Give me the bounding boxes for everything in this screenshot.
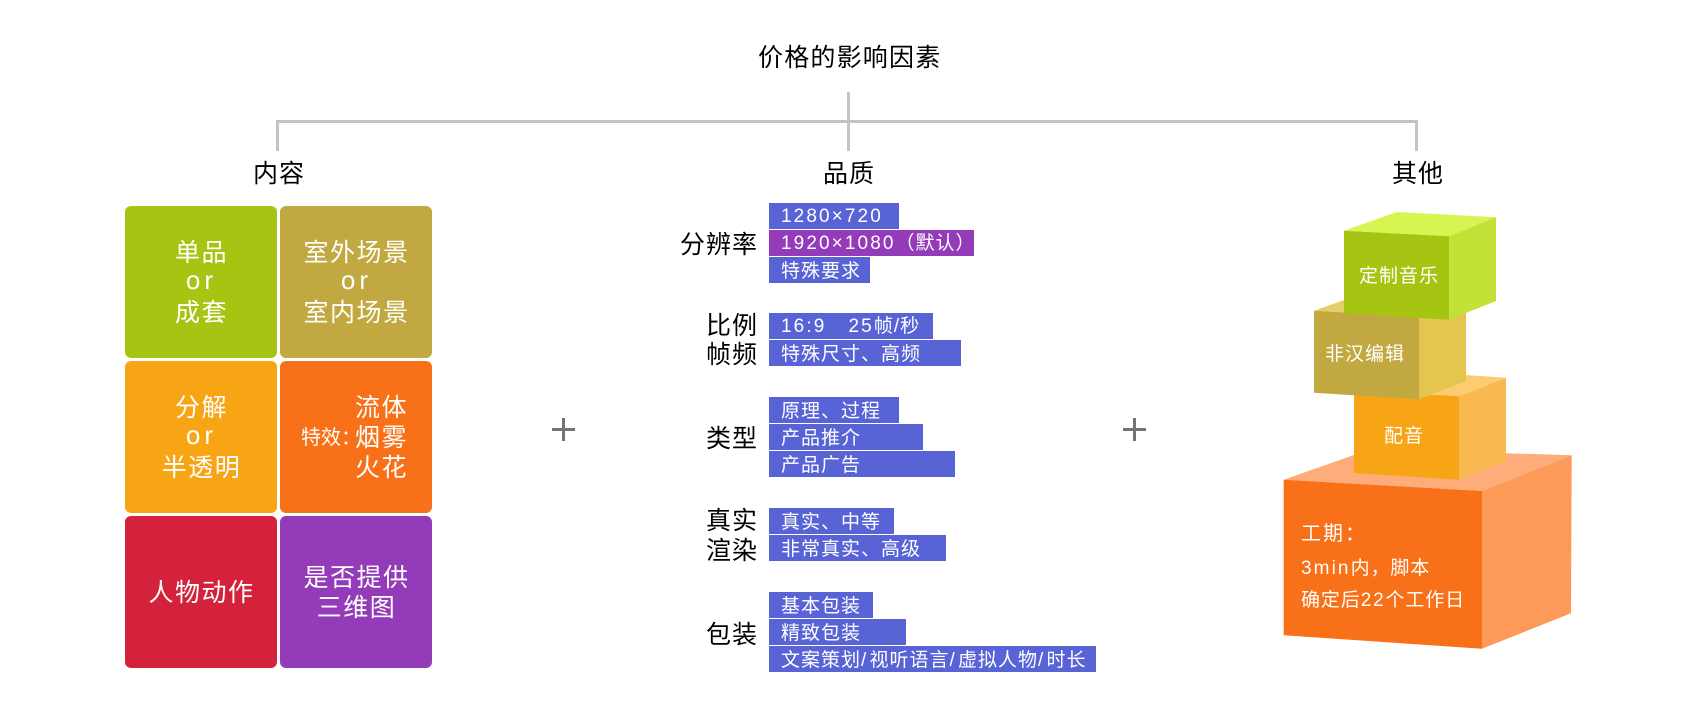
box: voice-over (1354, 371, 1506, 480)
icon: plus left (552, 418, 575, 441)
bar: product intro: 产品推介 (781, 428, 861, 449)
icon: plus right (1123, 418, 1146, 441)
tile: exploded or transparent: 半透明 (162, 454, 241, 482)
tile: outdoor or indoor scene: 室外场景 (303, 239, 410, 267)
bar: special size (769, 340, 961, 366)
tile: special effects (280, 361, 432, 513)
text: schedule: 确定后22个工作日 (1301, 590, 1465, 611)
text: custom music: 定制音乐 (1359, 266, 1439, 287)
heading: content: 内容 (253, 160, 305, 188)
tile: single or set: 成套 (175, 299, 228, 327)
tile: 3D model provided (280, 516, 432, 668)
connector tree (276, 92, 1418, 151)
box: custom music (1344, 212, 1496, 320)
box: non-Chinese editing (1314, 292, 1466, 399)
tile: 3D model provided: 三维图 (317, 594, 396, 622)
bar: refined packaging (769, 619, 906, 645)
title: 价格的影响因素 (758, 44, 941, 72)
effects list: 火花 (355, 454, 408, 482)
tile: exploded or transparent: or (186, 420, 217, 450)
bar: basic packaging (769, 592, 873, 618)
panel: content tile grid (125, 206, 432, 668)
text: voice-over: 配音 (1384, 426, 1424, 447)
text: schedule: 3min内，脚本 (1301, 558, 1430, 579)
effects list: 烟雾 (355, 424, 408, 452)
bars: resolution: 1920×1080（默认） (781, 233, 976, 254)
tile: exploded or transparent: 分解 (175, 394, 228, 422)
chart: stacked boxes (1284, 212, 1572, 649)
tile: character animation (125, 516, 277, 668)
label: resolution: 分辨率 (680, 231, 758, 259)
bar: ratio and fps: 16:9 25帧/秒 (781, 316, 920, 337)
bar: realistic medium: 真实、中等 (781, 512, 881, 533)
bar: principle (769, 397, 899, 423)
label: frame rate: 帧频 (706, 341, 758, 369)
bar: product ad: 产品广告 (781, 455, 861, 476)
bar: product ad (769, 451, 955, 477)
tile: 3D model provided: 是否提供 (303, 564, 410, 592)
tile: single or set: 单品 (175, 239, 228, 267)
bar: special size: 特殊尺寸、高频 (781, 344, 921, 365)
bar: very realistic: 非常真实、高级 (781, 539, 921, 560)
label: rendering: 渲染 (706, 537, 758, 565)
bar: very realistic (769, 535, 946, 561)
tile: outdoor or indoor scene (280, 206, 432, 358)
bar: principle: 原理、过程 (781, 401, 881, 422)
label: realism: 真实 (706, 507, 758, 535)
effects list (355, 394, 408, 482)
bar: basic packaging: 基本包装 (781, 596, 861, 617)
tile: outdoor or indoor scene: 室内场景 (303, 299, 410, 327)
bar: product intro (769, 424, 923, 450)
heading: other: 其他 (1392, 160, 1444, 188)
tile: exploded or transparent (125, 361, 277, 513)
bar: script and extras: 文案策划/视听语言/虚拟人物/时长 (781, 650, 1087, 671)
bars: resolution (769, 203, 976, 283)
bars: resolution: 特殊要求 (781, 261, 861, 282)
heading: quality: 品质 (823, 160, 875, 188)
effects list: 流体 (355, 394, 408, 422)
effects label: 特效： (301, 427, 361, 449)
label: packaging: 包装 (706, 621, 758, 649)
box: schedule (1284, 449, 1572, 649)
bar: realistic medium (769, 508, 894, 534)
text: schedule (1301, 523, 1465, 611)
tile: single or set: or (186, 265, 217, 295)
bars: resolution: 1280×720 (781, 206, 883, 227)
text: non-Chinese editing: 非汉编辑 (1325, 344, 1405, 365)
bar: refined packaging: 精致包装 (781, 623, 861, 644)
tile: character animation: 人物动作 (148, 579, 254, 607)
tile: outdoor or indoor scene: or (341, 265, 372, 295)
bar: ratio and fps (769, 313, 933, 339)
tile: single or set (125, 206, 277, 358)
label: type: 类型 (706, 425, 758, 453)
label: aspect ratio: 比例 (706, 312, 758, 340)
text: schedule: 工期： (1301, 523, 1367, 545)
